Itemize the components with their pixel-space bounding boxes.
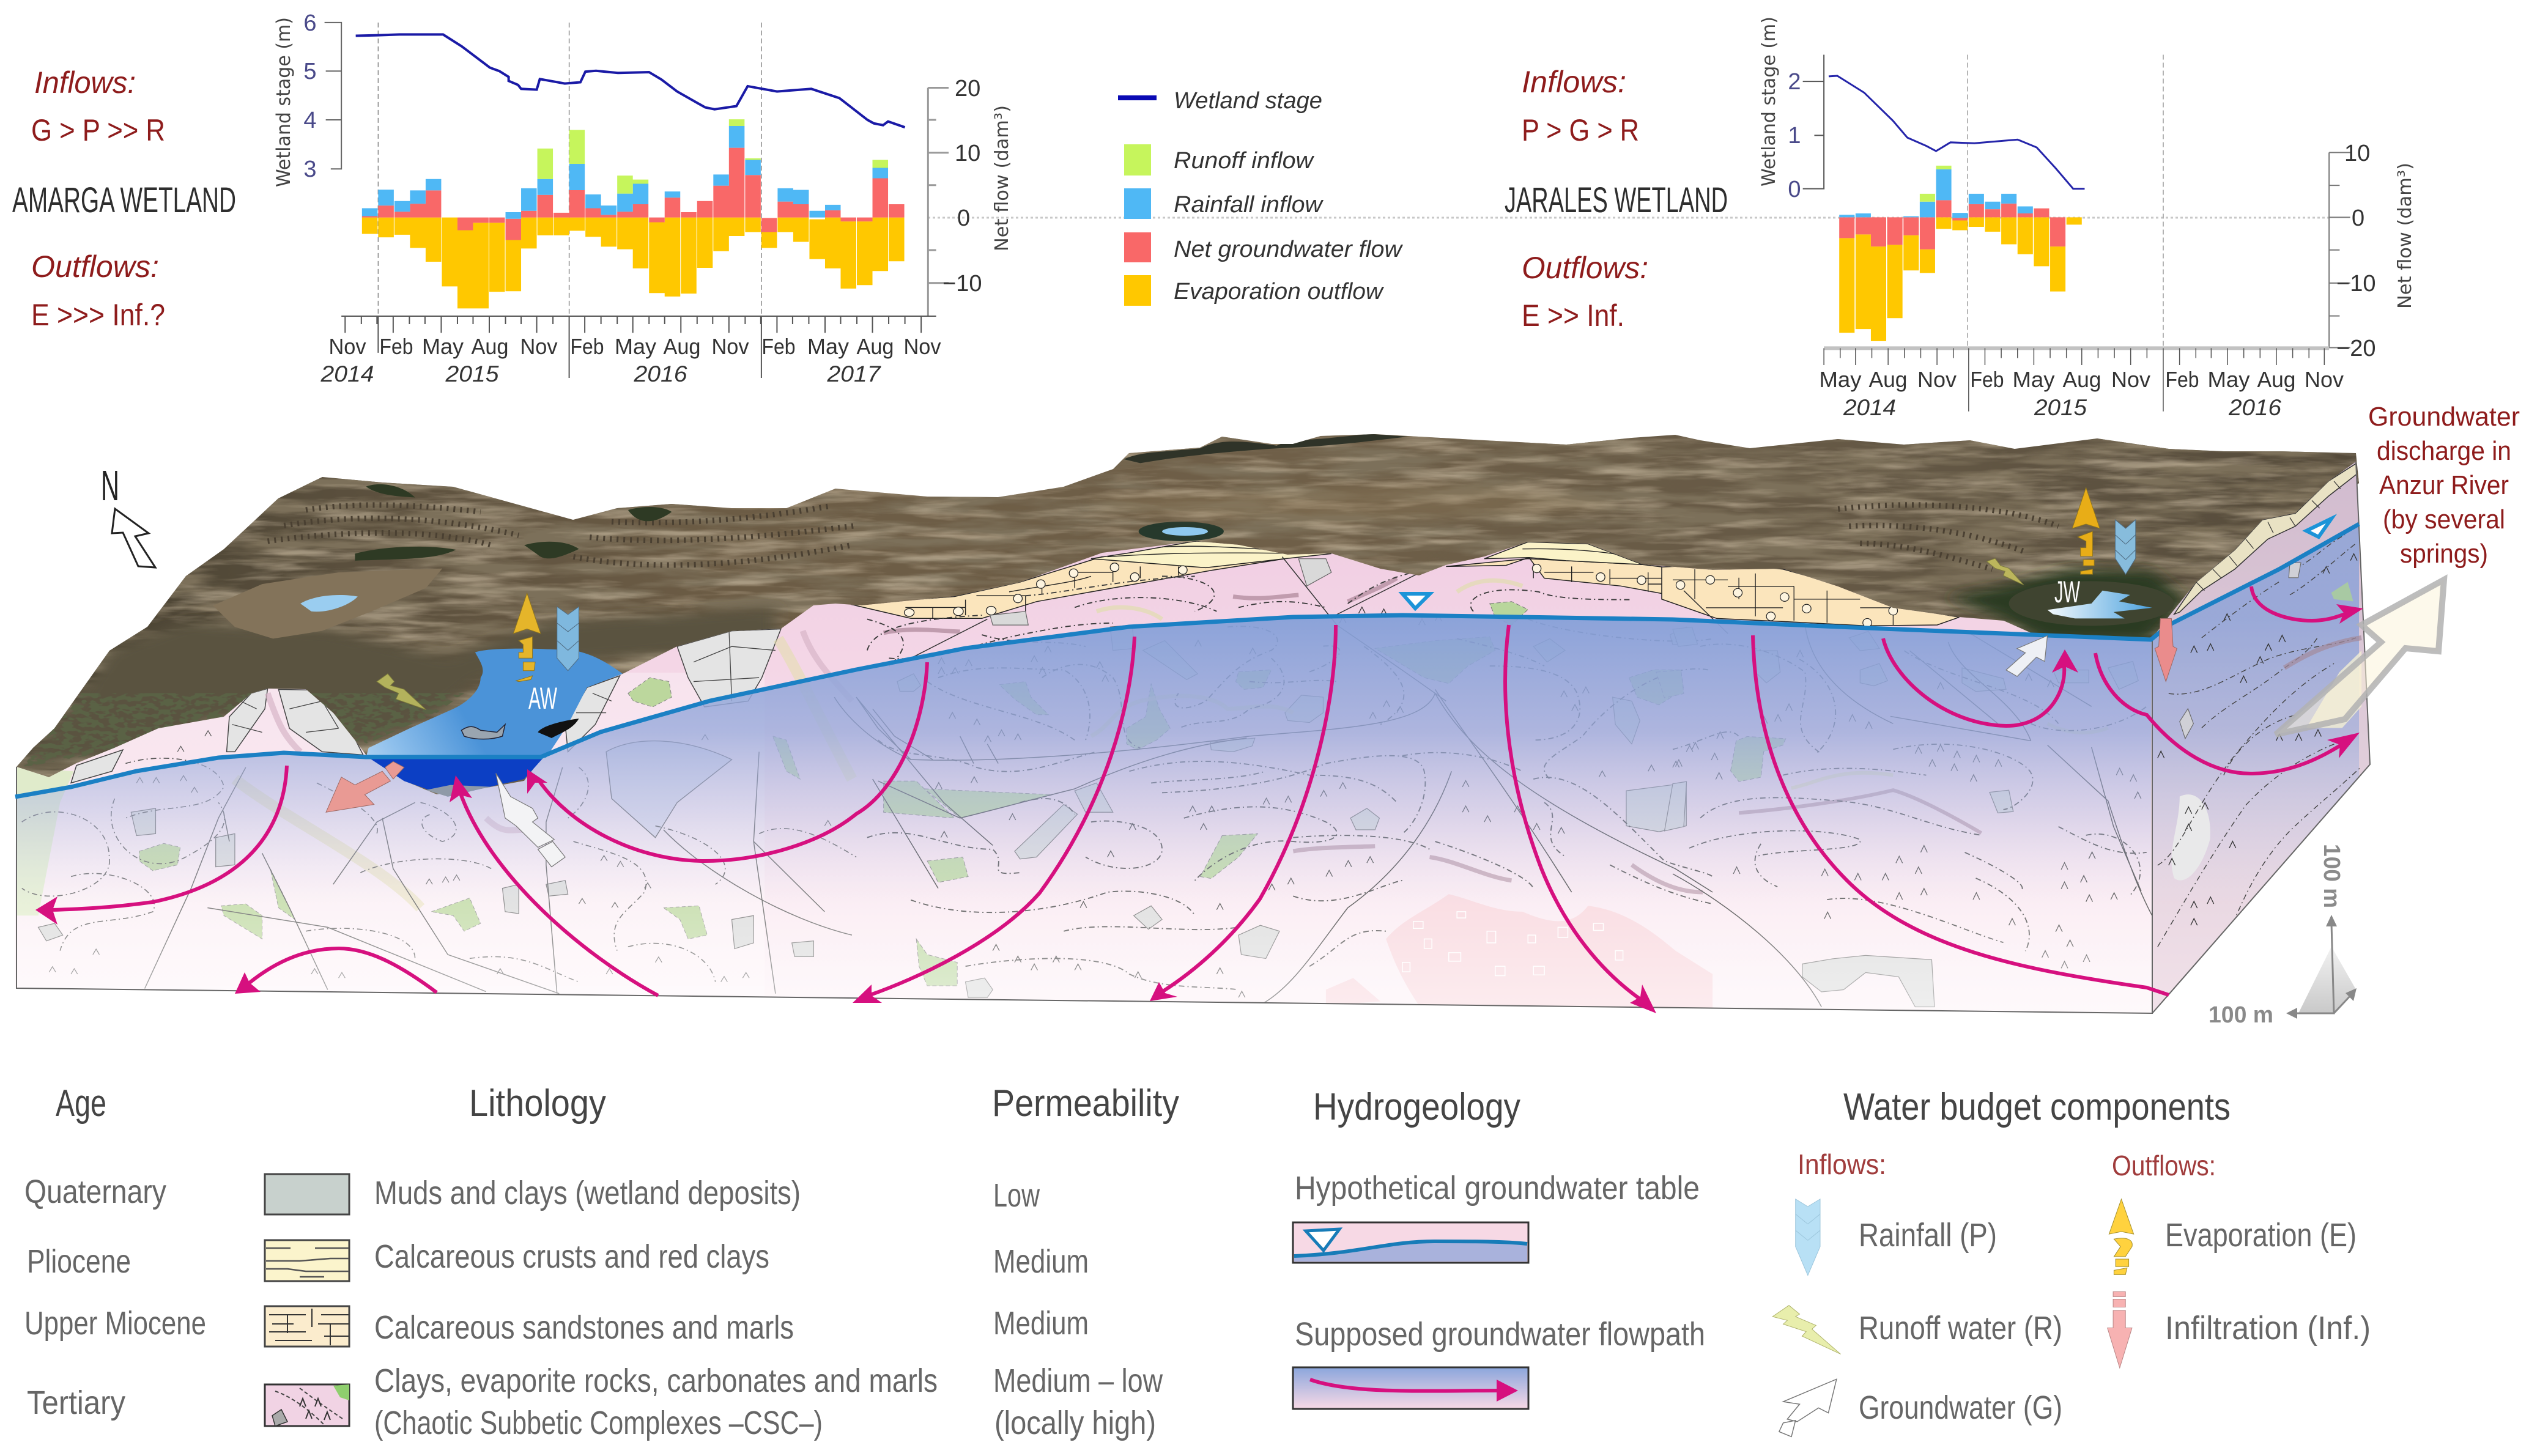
- Jarales flow tick labels: 0: [2352, 205, 2364, 231]
- tertiary label line one: Clays, evaporite rocks, carbonates and marls: [374, 1362, 938, 1399]
- Amarga rainfall bars: [362, 126, 888, 219]
- fault lines left: [145, 752, 852, 994]
- north label: N: [101, 462, 119, 509]
- rainfall label: Rainfall (P): [1859, 1217, 1997, 1254]
- panel: geological right face: [2141, 453, 2385, 1027]
- pale water body: [300, 595, 358, 612]
- crusts label: Calcareous crusts and red clays: [374, 1238, 769, 1275]
- chart: Jarales wetland stage and net flow: [1758, 17, 2416, 420]
- Amarga outflows ranking: E >>> Inf.?: [31, 298, 165, 332]
- Amarga left stage axis: [325, 23, 341, 169]
- right face lens: [2284, 638, 2361, 668]
- flowpath I: [1883, 638, 2064, 726]
- Amarga net groundwater bars: [362, 148, 905, 240]
- right face marl patches: [2306, 651, 2361, 728]
- muds label: Muds and clays (wetland deposits): [374, 1175, 801, 1211]
- Amarga inflows ranking: G > P >> R: [31, 113, 165, 147]
- Anzur River annotation: Anzur River: [2379, 470, 2509, 500]
- permeability medium Miocene: Medium: [993, 1305, 1089, 1342]
- Amarga month labels: Nov: [712, 334, 749, 359]
- legend: net groundwater label: Net groundwater flow: [1174, 237, 1404, 262]
- strip hatching: [2196, 481, 2341, 591]
- flowpath H: [1753, 635, 2169, 995]
- rainfall chevrons: [2115, 520, 2136, 574]
- groundwater flowpaths: [50, 586, 2349, 999]
- Anzur River annotation: Groundwater: [2368, 402, 2520, 432]
- wetland process icons: Jarales: [1987, 487, 2177, 682]
- flowpath D: [537, 662, 927, 861]
- age heading: Age: [56, 1082, 106, 1125]
- Jarales time ticks: [1824, 348, 2324, 412]
- flowpath label: Supposed groundwater flowpath: [1295, 1316, 1705, 1353]
- water budget heading: Water budget components: [1843, 1086, 2231, 1128]
- grey rock blocks: [39, 808, 813, 956]
- Quaternary: Quaternary: [24, 1173, 166, 1210]
- outflows subheading: Outflows:: [2112, 1150, 2216, 1181]
- legend: wetland stage line: [1118, 95, 1157, 100]
- caret marks left: [49, 731, 831, 982]
- caret marks near Jarales: [1676, 650, 2141, 968]
- Amarga stage tick labels: 4: [303, 108, 317, 133]
- Amarga flow tick labels: −10: [942, 271, 982, 297]
- legend: wetland stage label: Wetland stage: [1174, 88, 1322, 114]
- Amarga month labels: May: [422, 334, 464, 359]
- black cave opening: [538, 719, 579, 738]
- permeability low: Low: [993, 1177, 1040, 1214]
- permeability medium low: Medium – low: [993, 1362, 1163, 1399]
- Anzur River annotation: (by several: [2383, 504, 2505, 534]
- infiltration arrow: [2155, 618, 2177, 682]
- rainfall chevrons: [557, 607, 579, 671]
- swatch flowpath: [1293, 1367, 1528, 1409]
- Jarales month labels: May: [2208, 367, 2249, 392]
- field rows near Jarales: [1838, 505, 2059, 569]
- legend: net groundwater swatch: [1124, 232, 1151, 262]
- evaporation label: Evaporation (E): [2165, 1217, 2357, 1254]
- Jarales stage tick labels: 2: [1788, 69, 1801, 95]
- Tertiary: Tertiary: [27, 1384, 125, 1421]
- Jarales stage tick labels: 1: [1788, 123, 1801, 149]
- AW label: AW: [528, 681, 557, 715]
- lake sediments: [426, 785, 492, 797]
- Jarales month labels: Feb: [1971, 367, 2004, 392]
- legend: runoff label: Runoff inflow: [1174, 148, 1315, 174]
- caret marks: [935, 607, 1693, 997]
- Amarga month labels: Feb: [379, 334, 413, 359]
- right face carets: [2158, 553, 2357, 925]
- orchard rows on upper hill: [268, 505, 856, 565]
- green marl block: [1656, 670, 1786, 782]
- Anzur River annotation: springs): [2400, 539, 2488, 569]
- calcareous sandstone units: [851, 556, 1285, 618]
- Amarga right flow axis: [928, 88, 949, 316]
- Amarga month labels: [329, 334, 941, 359]
- evaporation arrow: [2072, 487, 2100, 574]
- Upper Miocene: Upper Miocene: [24, 1305, 206, 1342]
- chart: Amarga wetland stage and net flow: [273, 10, 1013, 386]
- Amarga stage tick labels: 3: [303, 157, 317, 182]
- Jarales right flow axis: [2329, 152, 2350, 347]
- icon: rainfall: [1796, 1199, 1820, 1276]
- sandstone nodules: [905, 563, 1684, 616]
- icon: groundwater: [1779, 1379, 1837, 1436]
- small wetland water: [1162, 527, 1208, 536]
- permeability medium Pliocene: Medium: [993, 1243, 1089, 1280]
- inflows subheading: Inflows:: [1798, 1148, 1886, 1180]
- groundwater arrow: [2006, 635, 2048, 676]
- JW label: JW: [2054, 575, 2080, 609]
- pale left section wash: [0, 673, 765, 1015]
- Jarales wetland stage line: [1829, 76, 2084, 189]
- infiltration arrow: [326, 761, 404, 812]
- permeability locally high: (locally high): [994, 1405, 1156, 1441]
- horizontal scale label: 100 m: [2209, 1002, 2273, 1028]
- Amarga stage tick labels: [303, 10, 317, 182]
- runoff arrow: [377, 674, 426, 709]
- Amarga stage axis title: Wetland stage (m): [273, 17, 295, 187]
- Jarales month labels: May: [1819, 367, 1862, 392]
- Amarga month labels: Feb: [570, 334, 604, 359]
- Jarales flow tick labels: [2336, 141, 2375, 361]
- sandstones label: Calcareous sandstones and marls: [374, 1309, 794, 1346]
- scale arrowheads: [2286, 915, 2357, 1019]
- Amarga flow tick labels: 0: [957, 205, 970, 231]
- Amarga year labels: 2017: [826, 361, 881, 386]
- Amarga year labels: 2014: [320, 361, 374, 386]
- Jarales month labels: Aug: [2062, 367, 2101, 392]
- scale pyramid: [2298, 947, 2356, 1013]
- Jarales wetland water: [2009, 581, 2174, 626]
- flowpath E: [868, 637, 1135, 996]
- panel: Amarga wetland budget summary: [12, 65, 236, 332]
- evaporation arrow: [513, 593, 541, 682]
- swatch groundwater table: [1293, 1222, 1528, 1263]
- rock salt squares: [1402, 912, 1623, 975]
- legend: hydrogeology column: [1293, 1086, 1705, 1409]
- Jarales month labels: Aug: [1869, 367, 1907, 392]
- green marl inclusions: [139, 678, 800, 939]
- Amarga stage tick labels: 5: [303, 59, 317, 84]
- water body: [2048, 591, 2152, 618]
- swatch sandstones: [265, 1306, 349, 1347]
- legend: lithology column: [265, 1082, 938, 1441]
- legend: rainfall swatch: [1124, 188, 1151, 219]
- grey fault blocks left: [71, 629, 781, 783]
- lake basin water body: [366, 649, 623, 758]
- Jarales time axis: [1824, 346, 2329, 350]
- Jarales runoff bars: [1920, 166, 1952, 202]
- Jarales year dividers: [1968, 55, 2163, 348]
- small wetland vegetation ring: [1139, 522, 1224, 541]
- Amarga flow axis title: Net flow (dam³): [991, 105, 1013, 251]
- Jarales month labels: Nov: [1917, 367, 1957, 392]
- Amarga month labels: Nov: [904, 334, 941, 359]
- Amarga year dividers: [378, 23, 761, 316]
- legend: age column: [24, 1082, 206, 1421]
- Anzur River annotation: discharge in: [2377, 436, 2511, 466]
- olive vegetated slope: [17, 607, 776, 771]
- north arrow: [101, 462, 155, 567]
- Amarga month labels: Aug: [471, 334, 509, 359]
- fault lines near Jarales: [1673, 591, 2169, 1007]
- north arrow icon: [112, 509, 155, 567]
- Amarga month labels: May: [615, 334, 656, 359]
- water table marker central: [1402, 594, 1430, 608]
- contour lines near Jarales: [1673, 644, 2147, 951]
- scale indicator: [2209, 844, 2357, 1028]
- purple and olive marl lenses: [884, 578, 1703, 892]
- water table marker right: [2306, 519, 2331, 537]
- Amarga flow tick labels: [942, 76, 982, 297]
- crust bedding and sandstone brick pattern: [905, 546, 1713, 618]
- Jarales stage tick labels: [1788, 69, 1801, 202]
- baseline dotted zero line: [928, 216, 2329, 219]
- Jarales inflows heading: Inflows:: [1522, 65, 1626, 99]
- permeability heading: Permeability: [992, 1082, 1179, 1125]
- groundwater label: Groundwater (G): [1859, 1389, 2062, 1426]
- hydrogeology heading: Hydrogeology: [1313, 1086, 1520, 1128]
- Jarales rainfall bars: [1839, 169, 2033, 218]
- crust sandstone hump near Jarales: [1662, 564, 1959, 626]
- Jarales year labels: 2016: [2228, 395, 2281, 420]
- fault lines: [834, 556, 1713, 1003]
- section base fading: [0, 813, 2202, 1021]
- tertiary label line two: (Chaotic Subbetic Complexes –CSC–): [374, 1405, 823, 1441]
- groundwater table label: Hypothetical groundwater table: [1295, 1170, 1700, 1207]
- dark vegetation around Jarales: [1948, 569, 2185, 642]
- panel: geological front face: [0, 526, 2202, 1027]
- Jarales month labels: Nov: [2111, 367, 2150, 392]
- Jarales month labels: May: [2012, 367, 2055, 392]
- right face calcareous strip: [2174, 462, 2359, 614]
- right face small blocks: [2180, 563, 2301, 739]
- wetland process icons: Amarga: [326, 593, 579, 867]
- swatch muds: [265, 1174, 349, 1214]
- runoff label: Runoff water (R): [1859, 1310, 2062, 1347]
- dash-dot contour lines: [867, 572, 1713, 989]
- Anzur River annotation: [2368, 402, 2520, 569]
- Amarga inflows heading: Inflows:: [34, 65, 136, 100]
- Jarales month labels: [1819, 367, 2344, 392]
- Amarga wetland title: AMARGA WETLAND: [12, 180, 236, 220]
- Amarga month labels: Aug: [856, 334, 894, 359]
- flowpath C: [460, 792, 658, 996]
- grey rock blocks: [897, 559, 1695, 997]
- rock salt pink body: [1326, 894, 1713, 1013]
- Jarales stage axis title: Wetland stage (m): [1758, 17, 1780, 187]
- legend: evaporation swatch: [1124, 275, 1151, 306]
- flowpath B: [246, 948, 437, 992]
- Jarales evaporation bars: [1839, 217, 2082, 341]
- flowpath arrowheads: [35, 604, 2363, 1013]
- icon: runoff: [1772, 1306, 1841, 1354]
- grey blocks: [1664, 627, 2138, 1007]
- Jarales left stage axis: [1803, 55, 1824, 189]
- waterbird: [462, 725, 505, 739]
- Amarga wetland stage line: [356, 34, 905, 127]
- flowpath F: [1162, 625, 1336, 992]
- infiltration label: Infiltration (Inf.): [2165, 1310, 2371, 1347]
- calcareous crust unit: [1091, 541, 1331, 567]
- panel: chart legend: [1118, 88, 1404, 306]
- Amarga month labels: Aug: [663, 334, 701, 359]
- Jarales flow tick labels: −20: [2336, 336, 2375, 361]
- flowpath J: [2095, 653, 2342, 774]
- Jarales month labels: Nov: [2305, 367, 2344, 392]
- legend: water budget components: [1772, 1086, 2371, 1436]
- lighter fields: [1135, 487, 1591, 516]
- Jarales flow tick labels: 10: [2344, 141, 2370, 166]
- Jarales stage tick labels: 0: [1788, 177, 1801, 202]
- marl lenses: [1739, 790, 1982, 833]
- runoff arrow: [1987, 558, 2024, 585]
- legend: runoff swatch: [1124, 144, 1151, 176]
- saturated zone blue wash: [0, 615, 2151, 1027]
- lake submerged bowl: [369, 758, 543, 797]
- icon: infiltration: [2108, 1292, 2132, 1368]
- Amarga year labels: 2015: [445, 361, 499, 386]
- Amarga month labels: Nov: [520, 334, 558, 359]
- contour lines left: [22, 758, 856, 982]
- Jarales year labels: [1843, 395, 2281, 420]
- Amarga flow tick labels: 10: [955, 141, 980, 166]
- lithology heading: Lithology: [469, 1082, 606, 1125]
- Amarga runoff bars: [538, 119, 888, 194]
- vertical scale label: 100 m: [2319, 844, 2344, 908]
- Jarales year labels: 2015: [2034, 395, 2087, 420]
- sandstone nodules near Jarales: [1676, 575, 1898, 627]
- Jarales month labels: Feb: [2165, 367, 2199, 392]
- flowpath A: [50, 766, 287, 910]
- second calcareous crust: [1484, 542, 1643, 564]
- Jarales month labels: Aug: [2257, 367, 2296, 392]
- hilltop shrub crest: [1124, 434, 1408, 463]
- groundwater arrow: [496, 773, 565, 867]
- scale axes: [2294, 923, 2352, 1013]
- vegetation ring: [2009, 581, 2174, 626]
- Amarga month labels: Feb: [762, 334, 795, 359]
- block subdivisions: [232, 631, 776, 732]
- Jarales net groundwater bars: [1839, 200, 2065, 249]
- Jarales outflows ranking: E >> Inf.: [1522, 298, 1624, 333]
- panel: Jarales wetland budget summary: [1505, 65, 1728, 333]
- legend: permeability column: [992, 1082, 1179, 1441]
- Amarga year labels: 2016: [633, 361, 687, 386]
- Amarga stage tick labels: 6: [303, 10, 317, 36]
- icon: evaporation: [2109, 1199, 2134, 1274]
- swatch tertiary: [265, 1384, 349, 1426]
- green marl blocks: [884, 602, 1684, 986]
- panel edge lines: [17, 462, 2370, 1013]
- Jarales flow axis title: Net flow (dam³): [2394, 163, 2416, 309]
- Amarga month labels: May: [807, 334, 849, 359]
- second calcareous sandstone: [1446, 558, 1713, 603]
- blue zone fault blocks: [606, 741, 731, 838]
- Jarales wetland title: JARALES WETLAND: [1505, 180, 1728, 220]
- water table line: [15, 524, 2359, 797]
- dark patches: [355, 484, 672, 561]
- panel: terrain surface: [17, 434, 2359, 794]
- Jarales flow tick labels: −10: [2336, 271, 2375, 297]
- Amarga year labels: [320, 361, 881, 386]
- Jarales inflows ranking: P > G > R: [1522, 113, 1639, 147]
- tan dry basin: [213, 569, 442, 638]
- vegetation speckle: [24, 693, 464, 766]
- Amarga time axis: [341, 316, 936, 378]
- saturated zone on right face: [2151, 524, 2359, 917]
- Pliocene: Pliocene: [27, 1243, 131, 1280]
- legend: evaporation label: Evaporation outflow: [1174, 279, 1385, 305]
- legend: rainfall label: Rainfall inflow: [1174, 192, 1324, 218]
- Amarga evaporation bars: [362, 218, 905, 308]
- Jarales outflows heading: Outflows:: [1522, 251, 1648, 285]
- flowpath G: [1505, 625, 1640, 999]
- brick pattern: [1673, 569, 1931, 625]
- marl streaks: [235, 638, 852, 907]
- swatch crusts: [265, 1240, 349, 1281]
- Amarga outflows heading: Outflows:: [31, 249, 159, 284]
- Amarga month labels: Nov: [329, 334, 366, 359]
- Jarales year labels: 2014: [1843, 395, 1896, 420]
- right face contours: [2158, 535, 2361, 947]
- green soft unit at left corner: [17, 767, 74, 915]
- Amarga flow tick labels: 20: [955, 76, 980, 102]
- Amarga wetland water: [366, 649, 623, 797]
- large discharge arrow toward Anzur River: [2276, 580, 2444, 734]
- flowpath K: [2251, 586, 2349, 621]
